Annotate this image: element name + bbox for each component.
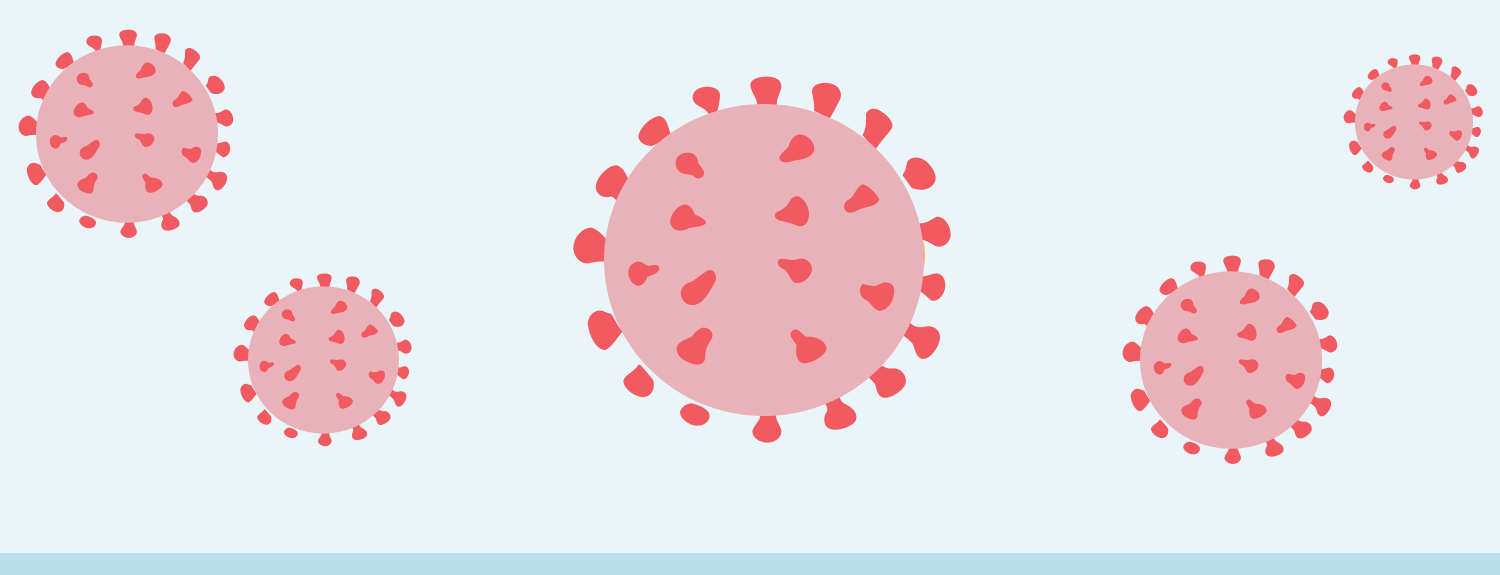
icon: virus lower right (1123, 256, 1336, 463)
ground band (0, 553, 1500, 575)
icon: virus small left (234, 274, 411, 446)
icon: virus large centre (575, 78, 949, 441)
icon: virus top left (19, 30, 232, 237)
icon: orange edge accent behind central virus (921, 238, 924, 269)
icon: virus small top right (1344, 55, 1482, 189)
